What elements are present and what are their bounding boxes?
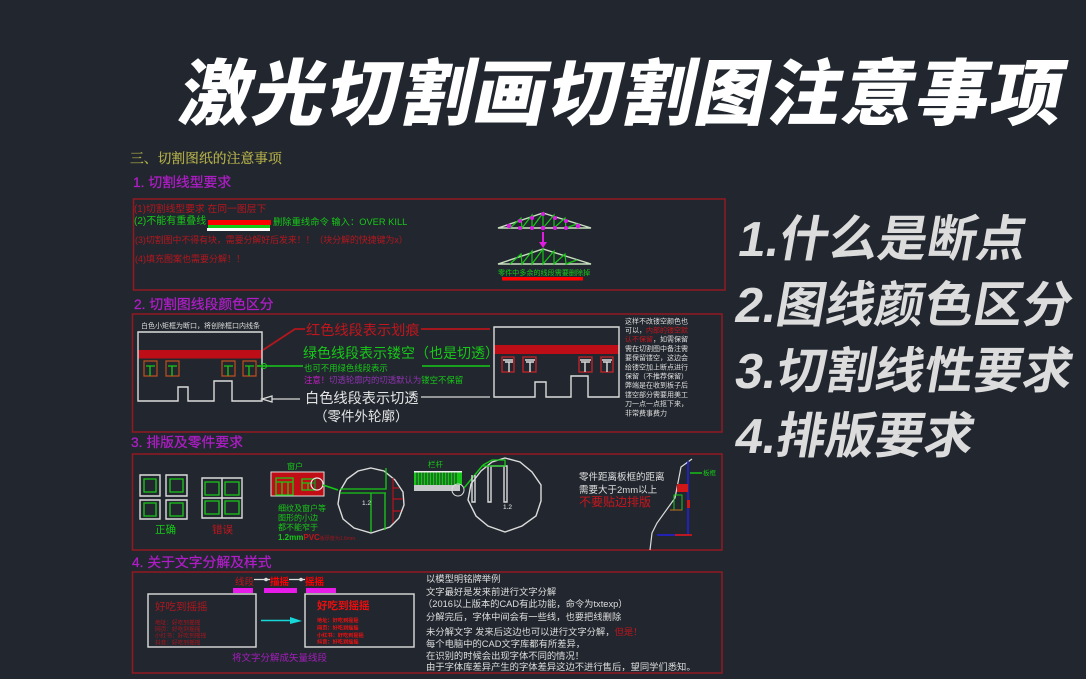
before box: 抖音：好吃到摇摇 [155,638,201,646]
window drawing [271,472,338,496]
window note: 1.2mmPVC板厚度为1.6mm [278,533,355,542]
rule 4: (4)填充图案也需要分解！！ [135,253,245,264]
hollow note: 注意！切透轮廓内的切透默认为镂空不保留 [304,375,463,385]
window note: 都不能窄于 [278,522,318,532]
sheet edge diagram [650,459,716,550]
section 1 heading: 1. 切割线型要求 [133,174,231,190]
right note text: 保留（不推荐保留） [625,372,688,380]
spacing note: 零件距离板框的距离 [579,471,665,483]
after box: 抖音：好吃到摇摇 [317,638,359,646]
left house drawing [138,332,262,401]
right note text: 镂空部分需要用美工 [625,390,688,399]
green line callout [257,345,499,373]
section 2 heading: 2. 切割图线段颜色区分 [134,296,274,312]
panel: section 4 [132,572,722,673]
red line callout [263,322,490,350]
railing drawing [414,465,483,496]
after box: 地址：好吃到摇摇 [317,616,359,624]
point 3: 3.切割线性要求 [731,343,1078,399]
rule 3: (3)切割图中不得有块，需要分解好后发来！！（块分解的快捷键为x） [135,234,408,245]
caption underline [502,277,583,280]
left house caption: 白色小矩框为断口，将创除框口内线条 [141,321,260,330]
point 4: 4.排版要求 [731,408,979,464]
overkill command: 删除重线命令 输入：OVER KILL [273,216,407,227]
text explanation: 未分解文字 发来后这边也可以进行文字分解，但是！ [426,626,642,637]
panel: section 3 [132,454,722,550]
panel: section 1 [134,199,725,290]
text explanation: 在识别的时候会出现字体不同的情况！ [426,650,584,661]
text style flow: 摇摇 [305,576,325,588]
title: 激光切割画切割图注意事项 [172,36,1078,140]
wrong layout squares [202,478,242,518]
rule 2: (2)不能有重叠线 [134,214,206,227]
magnified railing detail: 1.2 [503,504,512,511]
right note text: 刀一点一点抠下来， [625,399,688,408]
point 1: 1.什么是断点 [734,211,1031,267]
rule 1: (1)切割线型要求 在同一图层下 [134,202,266,215]
CAD drawing sheet [130,150,725,673]
text explanation: 分解完后，字体中间会有一些线，也要把线删除 [426,611,622,622]
white line callout [262,390,490,424]
window label: 窗户 [287,461,303,471]
section 3 heading: 3. 排版及零件要求 [131,435,243,450]
before box: 网页：好吃到摇摇 [155,625,201,633]
green line callout: 绿色线段表示镂空（也是切透） [303,345,499,361]
section 4 heading: 4. 关于文字分解及样式 [132,555,272,570]
window note: 细纹及窗户等 [278,503,326,513]
window note [278,503,355,542]
spacing note [579,471,665,509]
after box: 网页：好吃到摇摇 [317,624,359,632]
text style flow [233,576,336,593]
white line callout: （零件外轮廓） [314,408,408,424]
correct layout squares [140,475,187,519]
text explanation: （2016以上版本的CAD有此功能，命令为txtexp） [423,598,628,609]
magnified railing detail [468,458,541,532]
right note text: 要保留镂空，这边会 [625,353,688,362]
correct label: 正确 [155,523,176,536]
before box: 小红书：好吃到摇摇 [155,632,206,640]
text style flow: 描摇 [270,576,290,588]
truss caption: 零件中多余的线段需要删除掉 [498,268,590,277]
key points list [731,211,1078,464]
right note text: 非常费事费力 [625,408,667,417]
right note text: 可以，内部的镂空默 [625,326,688,334]
magnified window detail: 1.2 [362,500,371,507]
green line callout: 也可不用绿色线段表示 [304,363,388,373]
text explanation: 以模型明铭牌举例 [426,573,500,584]
wrong label: 错误 [212,523,233,536]
white line callout: 白色线段表示切透 [305,390,419,407]
right note text: 这样不改镂空颜色也 [625,316,688,325]
overlap line sample [207,220,271,231]
sheet edge diagram: 板框 [703,468,716,477]
text explanation [423,573,696,672]
magnified window detail [338,468,404,533]
truss diagram [498,212,591,264]
after box [305,594,414,647]
panel: section 2 [132,314,722,432]
text explanation: 每个电脑中的CAD文字库都有所差异， [426,638,585,649]
right note text: 需在切割图中备注需 [625,344,688,353]
before box: 好吃到摇摇 [155,600,208,613]
sheet heading: 三、切割图纸的注意事项 [130,150,282,166]
text explanation: 文字最好是发来前进行文字分解 [426,586,556,597]
before box [148,594,256,647]
spacing note: 不要贴边排版 [579,495,651,509]
after box: 好吃到摇摇 [317,599,370,612]
text explanation: 由于字体库差异产生的字体差异这边不进行售后，望同学们悉知。 [426,661,696,672]
window note: 图形的小边 [278,512,318,522]
before box: 地址：好吃到摇摇 [155,618,201,626]
right note text: 认不保留，如需保留 [625,335,688,344]
right note text: 给镂空加上断点进行 [625,362,688,371]
cyan arrow [261,617,302,624]
conversion caption: 将文字分解成矢量线段 [232,652,328,664]
spacing note: 需要大于2mm以上 [579,484,658,496]
text style flow: 线段 [235,576,255,588]
right house drawing [494,327,619,397]
right note text [625,316,688,417]
point 2: 2.图线颜色区分 [731,277,1078,333]
railing label: 栏杆 [428,459,443,469]
right note text: 弊端是在收到板子后 [625,381,688,390]
red line callout: 红色线段表示划痕 [306,322,420,339]
after box: 小红书：好吃到摇摇 [317,631,364,639]
